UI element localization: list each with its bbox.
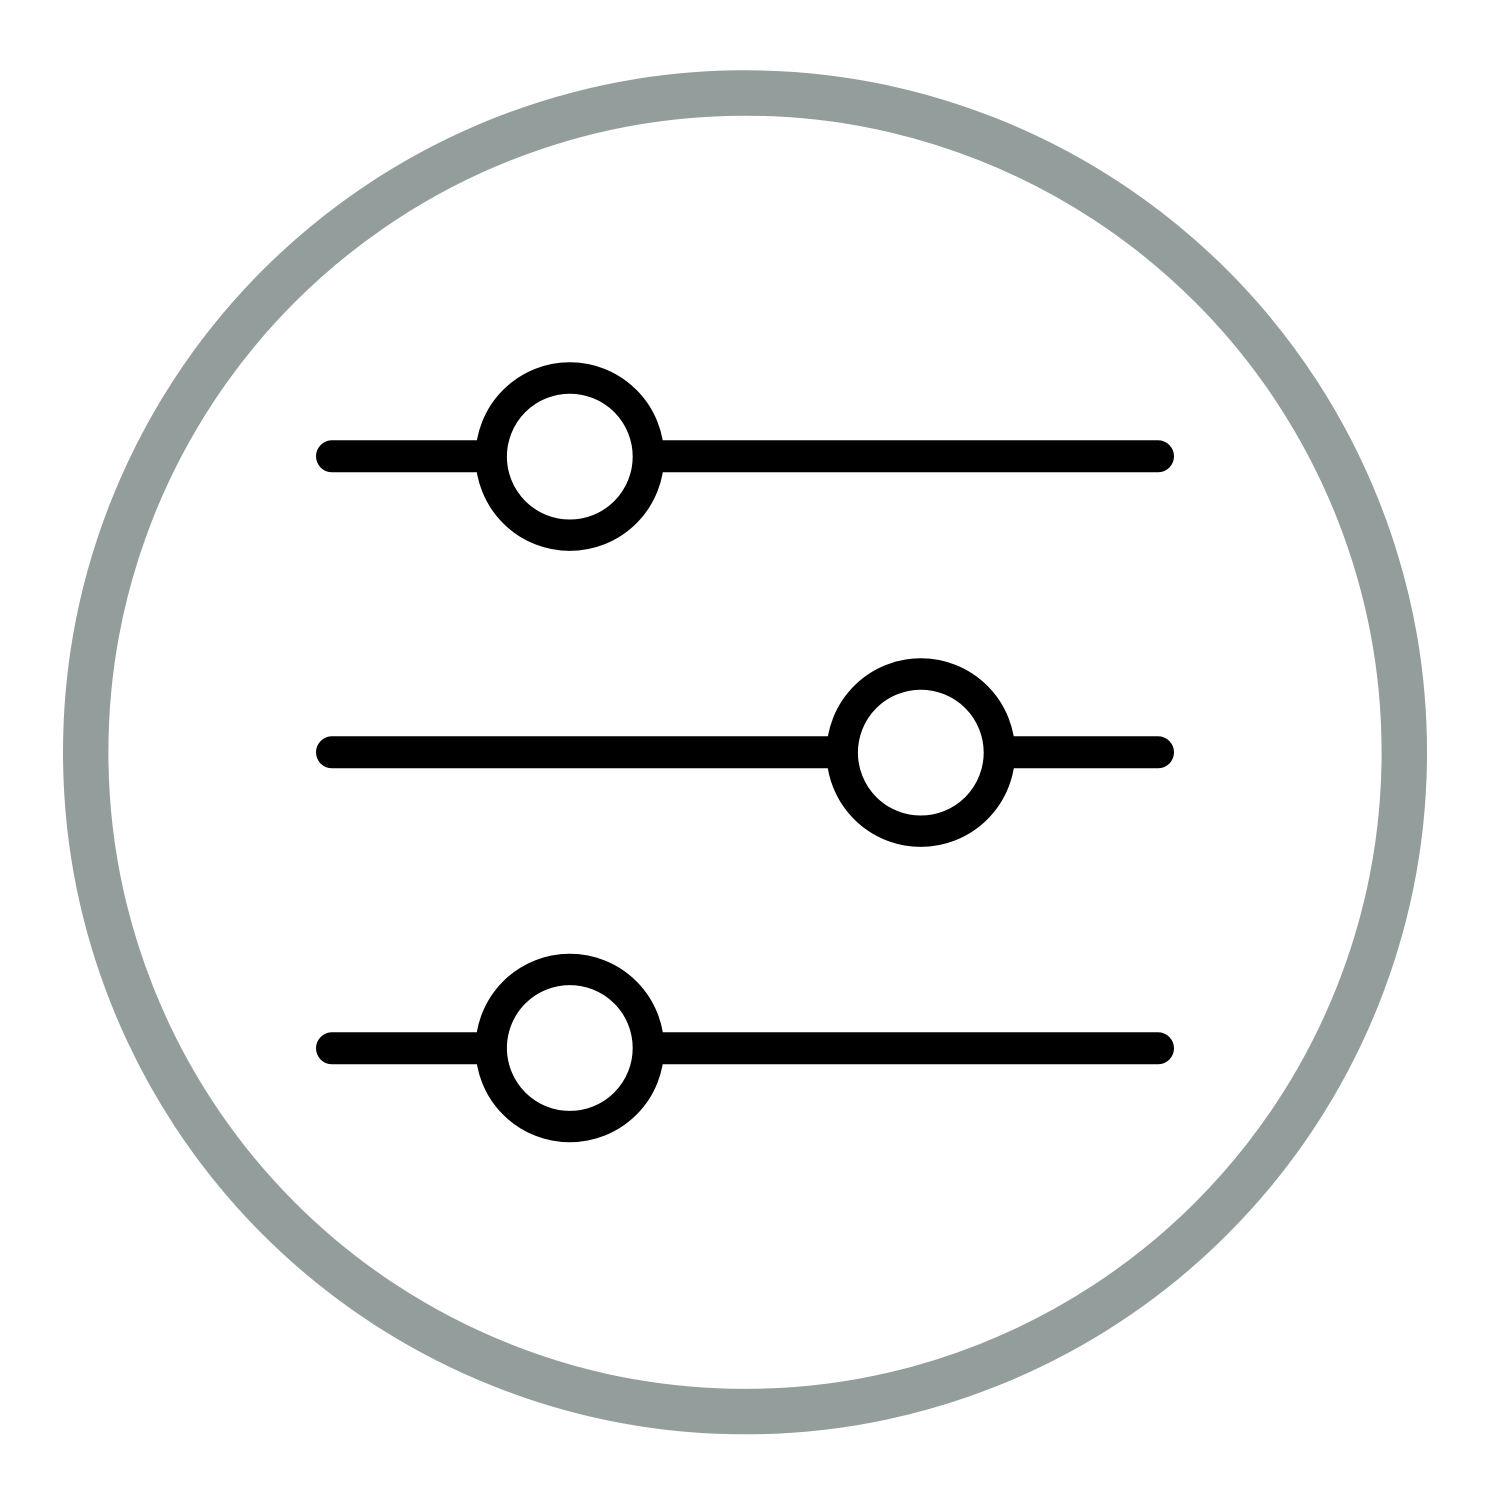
outer grey ring [86, 93, 1404, 1412]
slider: bottom [332, 969, 1158, 1127]
slider: top [332, 378, 1158, 535]
slider: middle [332, 674, 1158, 831]
